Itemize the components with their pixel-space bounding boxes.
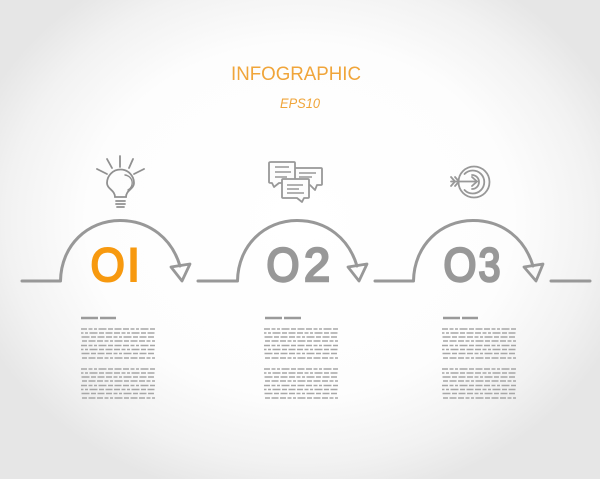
step 1 number: O — [90, 239, 125, 291]
step 3 number: O — [444, 240, 476, 292]
trailing line — [551, 280, 590, 282]
step 3 arc arrow — [375, 220, 543, 281]
step 2 arc arrow — [198, 220, 367, 281]
step 2 number: O — [266, 240, 299, 292]
icon: speech bubbles — [269, 162, 322, 202]
title: INFOGRAPHIC — [231, 63, 361, 85]
step 2 number — [266, 238, 330, 292]
text block 2 — [264, 318, 338, 398]
subtitle: EPS10 — [280, 95, 320, 111]
text block 3 — [442, 318, 516, 398]
step 1 number — [90, 238, 140, 291]
step 1 number: I — [127, 238, 140, 291]
text block 1 — [81, 318, 155, 398]
step 1 arc arrow — [22, 220, 190, 281]
step 3 number: 3 — [478, 238, 500, 291]
step 2 number: 2 — [304, 238, 330, 291]
step 3 number — [444, 238, 500, 292]
icon: light bulb — [97, 156, 144, 207]
icon: target with arrow — [451, 166, 490, 198]
